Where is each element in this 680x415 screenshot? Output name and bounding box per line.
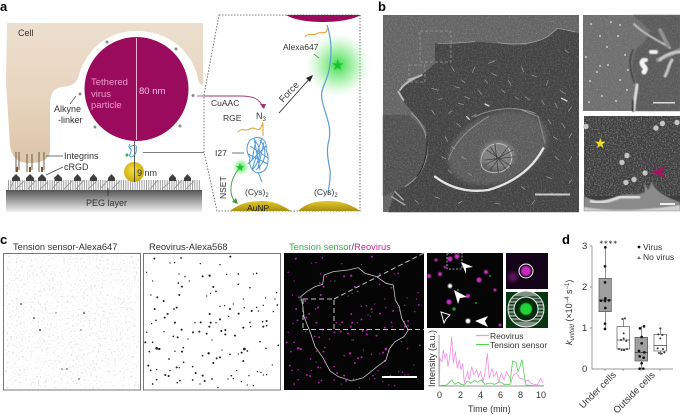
chart: intensity trace bbox=[427, 330, 547, 414]
panel a inset: tension sensor mechanism: (Cys) bbox=[314, 187, 334, 197]
box under cells no virus bbox=[617, 317, 630, 351]
x ticks: 10 bbox=[536, 390, 546, 400]
significance: ∗∗∗∗ bbox=[599, 240, 618, 246]
panel a inset: tension sensor mechanism: 2 bbox=[334, 193, 338, 199]
nset arrow bbox=[231, 170, 238, 203]
PEG brush bbox=[8, 180, 201, 189]
arrowheads bbox=[454, 262, 488, 327]
box outside cells virus bbox=[635, 325, 648, 370]
y ticks: 1 bbox=[582, 323, 587, 334]
x ticks: 2 bbox=[458, 390, 463, 400]
i27 domain bbox=[247, 138, 268, 182]
merged image title: Tension sensor/Reovirus bbox=[289, 242, 391, 252]
cuaac arrow bbox=[205, 96, 263, 108]
panel a: virus tethered to cell: particle bbox=[91, 100, 122, 111]
image: merged channel bbox=[284, 253, 424, 390]
tension image title: Tension sensor-Alexa647 bbox=[13, 242, 117, 252]
cys labels: 2 bbox=[265, 193, 269, 199]
nset label: NSET bbox=[218, 176, 228, 199]
legend bbox=[638, 246, 640, 248]
image: reovirus channel bbox=[144, 254, 280, 390]
legend bbox=[476, 334, 489, 336]
80 nm measure bbox=[136, 38, 138, 140]
panel a: virus tethered to cell: cRGD bbox=[64, 162, 89, 172]
x ticks bbox=[437, 390, 546, 400]
cell surface microvilli bbox=[415, 50, 572, 205]
panel d label: d bbox=[562, 232, 570, 247]
tension trace bbox=[439, 360, 543, 386]
panel a: virus tethered to cell: virus bbox=[91, 89, 111, 100]
PEG label: PEG layer bbox=[86, 198, 127, 208]
panel a: virus tethered to cell bbox=[6, 23, 218, 212]
alkyne label: Alkyne bbox=[54, 104, 81, 114]
box plot: No virus bbox=[643, 252, 674, 262]
ground layer bbox=[6, 190, 202, 212]
virus cap bbox=[286, 15, 361, 22]
y label: Intensity (a.u.) bbox=[427, 330, 437, 387]
scale bar bbox=[653, 102, 675, 104]
panel a: virus tethered to cell: -linker bbox=[58, 115, 83, 125]
aunp label: AuNP bbox=[247, 203, 270, 213]
panel c label: c bbox=[0, 232, 7, 247]
x labels: Under cells bbox=[577, 370, 619, 411]
chart: intensity trace: Reovirus bbox=[490, 331, 524, 341]
i27 label: I27 bbox=[215, 148, 227, 158]
alexa label: Alexa647 bbox=[283, 42, 319, 52]
zoomed merged tile bbox=[427, 253, 503, 328]
virus particle bbox=[84, 37, 188, 141]
tile reovirus spot bbox=[506, 253, 548, 289]
y ticks: 0 bbox=[582, 364, 587, 375]
axes bbox=[439, 335, 544, 386]
SEM zoom bottom right bbox=[583, 116, 680, 211]
magenta arrowhead bbox=[651, 166, 665, 178]
nucleus region bbox=[437, 97, 559, 199]
scale bar bbox=[382, 376, 417, 378]
cell membrane body bbox=[6, 23, 203, 163]
panel a inset: tension sensor mechanism bbox=[204, 15, 370, 213]
force label: Force bbox=[277, 80, 302, 105]
orange rge tail bbox=[305, 27, 328, 37]
tile tension spot bbox=[506, 291, 548, 328]
x ticks: 0 bbox=[437, 390, 442, 400]
scale bar bbox=[535, 194, 570, 196]
y label: s bbox=[564, 289, 574, 297]
leader line bbox=[143, 152, 204, 154]
y ticks: 3 bbox=[582, 241, 587, 252]
small tension sensor bbox=[129, 144, 137, 157]
chart: intensity trace: Tension sensor bbox=[490, 340, 547, 350]
crgd anchors bbox=[12, 174, 191, 181]
cell label: Cell bbox=[18, 28, 34, 38]
y label: ) bbox=[564, 280, 574, 283]
x ticks: 8 bbox=[518, 390, 523, 400]
image: tension sensor channel bbox=[4, 254, 140, 390]
folded sensor tail bbox=[238, 122, 263, 136]
scale bar bbox=[660, 203, 675, 205]
cell outline bbox=[301, 268, 408, 381]
reovirus image title: Reovirus-Alexa568 bbox=[149, 242, 228, 252]
integrin and crgd labels: Integrins bbox=[64, 151, 99, 161]
dashed region bbox=[303, 253, 424, 330]
virus label: Tethered bbox=[91, 77, 128, 88]
gold particles bbox=[585, 21, 629, 103]
axes bbox=[590, 246, 673, 371]
reovirus trace bbox=[439, 337, 543, 385]
9 nm label: 9 nm bbox=[137, 168, 157, 178]
x ticks: 4 bbox=[478, 390, 483, 400]
cuaac label: CuAAC bbox=[211, 98, 239, 108]
glow bbox=[306, 33, 370, 97]
box plot bbox=[564, 240, 674, 415]
panel b: SEM micrographs bbox=[383, 15, 680, 212]
bright cell edges bbox=[392, 28, 575, 205]
size label: 80 nm bbox=[139, 86, 165, 97]
virus particles bbox=[583, 120, 680, 185]
panel a inset: tension sensor mechanism: ★ bbox=[235, 162, 245, 174]
y label: −1 bbox=[565, 282, 571, 290]
box outside cells no virus bbox=[654, 327, 667, 355]
x ticks: 6 bbox=[498, 390, 503, 400]
box under cells virus bbox=[599, 246, 611, 330]
n3 label: 3 bbox=[262, 117, 266, 123]
dotted frame bbox=[204, 15, 360, 211]
box plot: Virus bbox=[643, 242, 662, 252]
star on stretched sensor: ★ bbox=[331, 57, 344, 74]
SEM zoom top right bbox=[583, 15, 680, 111]
force arrow bbox=[279, 77, 311, 113]
x label: Time (min) bbox=[468, 404, 511, 414]
yellow star: ★ bbox=[594, 135, 607, 151]
gold surfaces bbox=[230, 201, 291, 211]
nset glow and star bbox=[232, 158, 250, 176]
y label: −4 bbox=[565, 296, 571, 303]
stretched linker bbox=[322, 25, 331, 195]
alkyne linkers bbox=[78, 40, 194, 128]
sem grain bbox=[383, 15, 579, 212]
y ticks: 2 bbox=[582, 282, 587, 293]
y ticks bbox=[582, 241, 587, 375]
n3 label: N bbox=[256, 111, 262, 121]
y label: k bbox=[564, 340, 574, 345]
gold nanoparticle bbox=[124, 162, 144, 182]
bottom cell edge bbox=[584, 182, 680, 211]
integrins bbox=[16, 152, 44, 172]
SEM whole cell bbox=[383, 15, 579, 212]
cys labels: (Cys) bbox=[245, 187, 265, 197]
box plot: Outside cells bbox=[611, 370, 658, 415]
y label: (×10 bbox=[564, 303, 574, 324]
dashed selection boxes bbox=[409, 31, 451, 82]
y label: unfold bbox=[570, 323, 576, 340]
rge label: RGE bbox=[223, 113, 242, 123]
